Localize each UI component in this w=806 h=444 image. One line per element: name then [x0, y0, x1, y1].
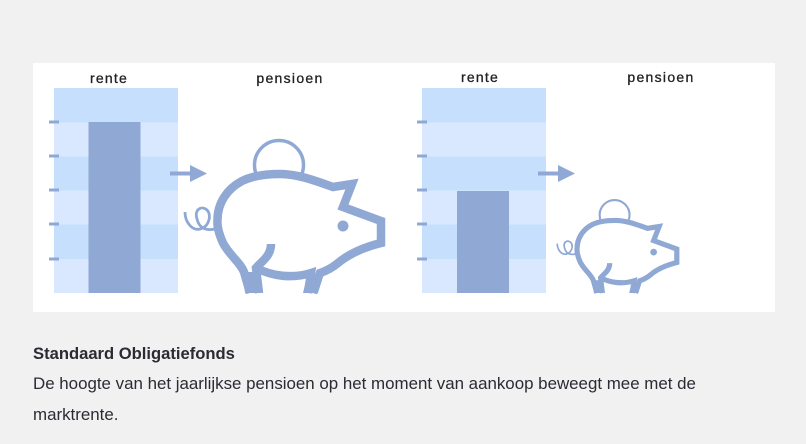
- caption text: [33, 374, 696, 424]
- left chart: rente: [49, 88, 178, 293]
- right label: pensioen: pensioen: [627, 69, 695, 85]
- small piggy bank icon: [557, 200, 677, 293]
- left label: rente: rente: [90, 70, 128, 86]
- right arrow: [538, 165, 575, 182]
- right chart: rente: [417, 88, 546, 293]
- caption heading: Standaard Obligatiefonds: [33, 344, 235, 363]
- infographic panel: [33, 63, 775, 312]
- left label: pensioen: pensioen: [256, 70, 324, 86]
- white background panel: [33, 63, 775, 312]
- left arrow: [170, 165, 207, 182]
- caption text: marktrente.: [33, 405, 118, 424]
- caption text: De hoogte van het jaarlijkse pensioen op het moment van aankoop beweegt mee met de: [33, 374, 696, 393]
- right label: rente: rente: [461, 69, 499, 85]
- large piggy bank icon: [185, 140, 381, 293]
